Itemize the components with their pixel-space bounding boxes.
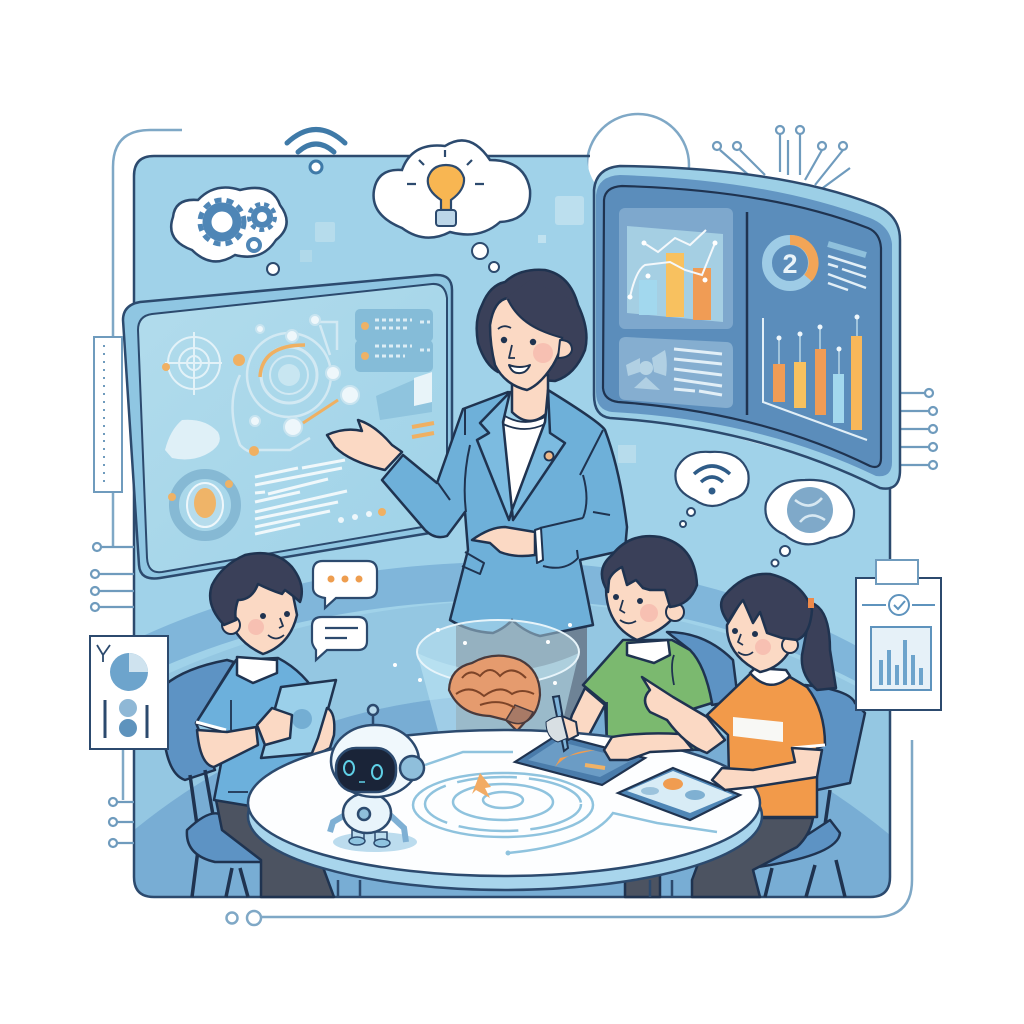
- tablet under right boy's hand: [515, 735, 645, 785]
- chat bubble lines: [312, 617, 367, 660]
- donut chart: 2: [782, 249, 798, 279]
- left boy hands: [257, 708, 292, 745]
- right boy trousers: [625, 860, 660, 897]
- right boy's forearm on tablet: [604, 733, 693, 760]
- right boy sleeve arm: [565, 688, 605, 737]
- girl's arms: [642, 677, 822, 790]
- teacher jacket: [382, 390, 627, 636]
- outer circuit frame: [113, 130, 912, 925]
- girl head: [727, 595, 795, 672]
- dial: [174, 474, 236, 536]
- left boy chair: [162, 660, 234, 780]
- right boy chair: [667, 632, 738, 705]
- teacher neck: [512, 375, 548, 421]
- background panel: [134, 156, 890, 897]
- teacher hands: [327, 420, 402, 470]
- left boy shirt: [196, 658, 320, 806]
- chat bubble orange dots: [313, 561, 377, 608]
- teacher lapels: [477, 390, 565, 520]
- girl ponytail: [802, 603, 836, 690]
- left boy tablet: [261, 680, 336, 758]
- left boy head: [228, 580, 297, 654]
- teacher shirt: [502, 420, 546, 512]
- table hologram rings: [413, 752, 717, 853]
- right boy shirt: [583, 640, 712, 750]
- teacher collar: [503, 416, 547, 429]
- circuit left: [91, 543, 134, 847]
- teacher trousers: [456, 622, 587, 740]
- robot: [330, 705, 424, 852]
- stylus and hand: [546, 696, 578, 751]
- right boy head: [606, 552, 680, 640]
- left boy arm: [197, 727, 258, 767]
- tablet right on table: [618, 768, 740, 820]
- bar chart: right: [763, 314, 867, 440]
- side card left: gauge strip: [94, 337, 122, 492]
- hologram cylinder: [393, 620, 579, 805]
- left boy trousers: [216, 800, 334, 897]
- round table: [248, 730, 762, 897]
- small radial diagram: [165, 332, 222, 395]
- right boy and girl: [565, 536, 865, 897]
- side card right: clipboard chart: [856, 560, 941, 710]
- donut chart: [767, 240, 814, 286]
- bar chart: left: [628, 230, 718, 320]
- panel widgets: [355, 309, 433, 342]
- thought bubble: gears: [171, 188, 287, 275]
- text lines: [255, 460, 347, 534]
- girl chair: [805, 685, 865, 790]
- girl shirt: [707, 672, 825, 817]
- network nodes: [250, 315, 359, 436]
- thought bubble: light bulb: [374, 140, 530, 272]
- side card left: pie: [90, 636, 168, 749]
- thought bubble: brain: [765, 480, 854, 566]
- thought bubble: wifi: [675, 452, 749, 527]
- top circle: [587, 114, 689, 216]
- teacher: [327, 270, 627, 740]
- girl trousers: [692, 818, 813, 897]
- teacher fringe: [506, 280, 572, 338]
- teacher face: [490, 298, 562, 390]
- circuit top right: [713, 126, 850, 190]
- holographic screen left: [123, 275, 452, 578]
- left boy: [162, 553, 336, 897]
- hologram brain: [449, 656, 540, 731]
- teacher hair back: [477, 270, 586, 381]
- curved data screen right: [594, 166, 900, 489]
- circuit right: [900, 389, 937, 469]
- icon: wifi top: [287, 130, 345, 173]
- main radial diagram: [232, 322, 338, 452]
